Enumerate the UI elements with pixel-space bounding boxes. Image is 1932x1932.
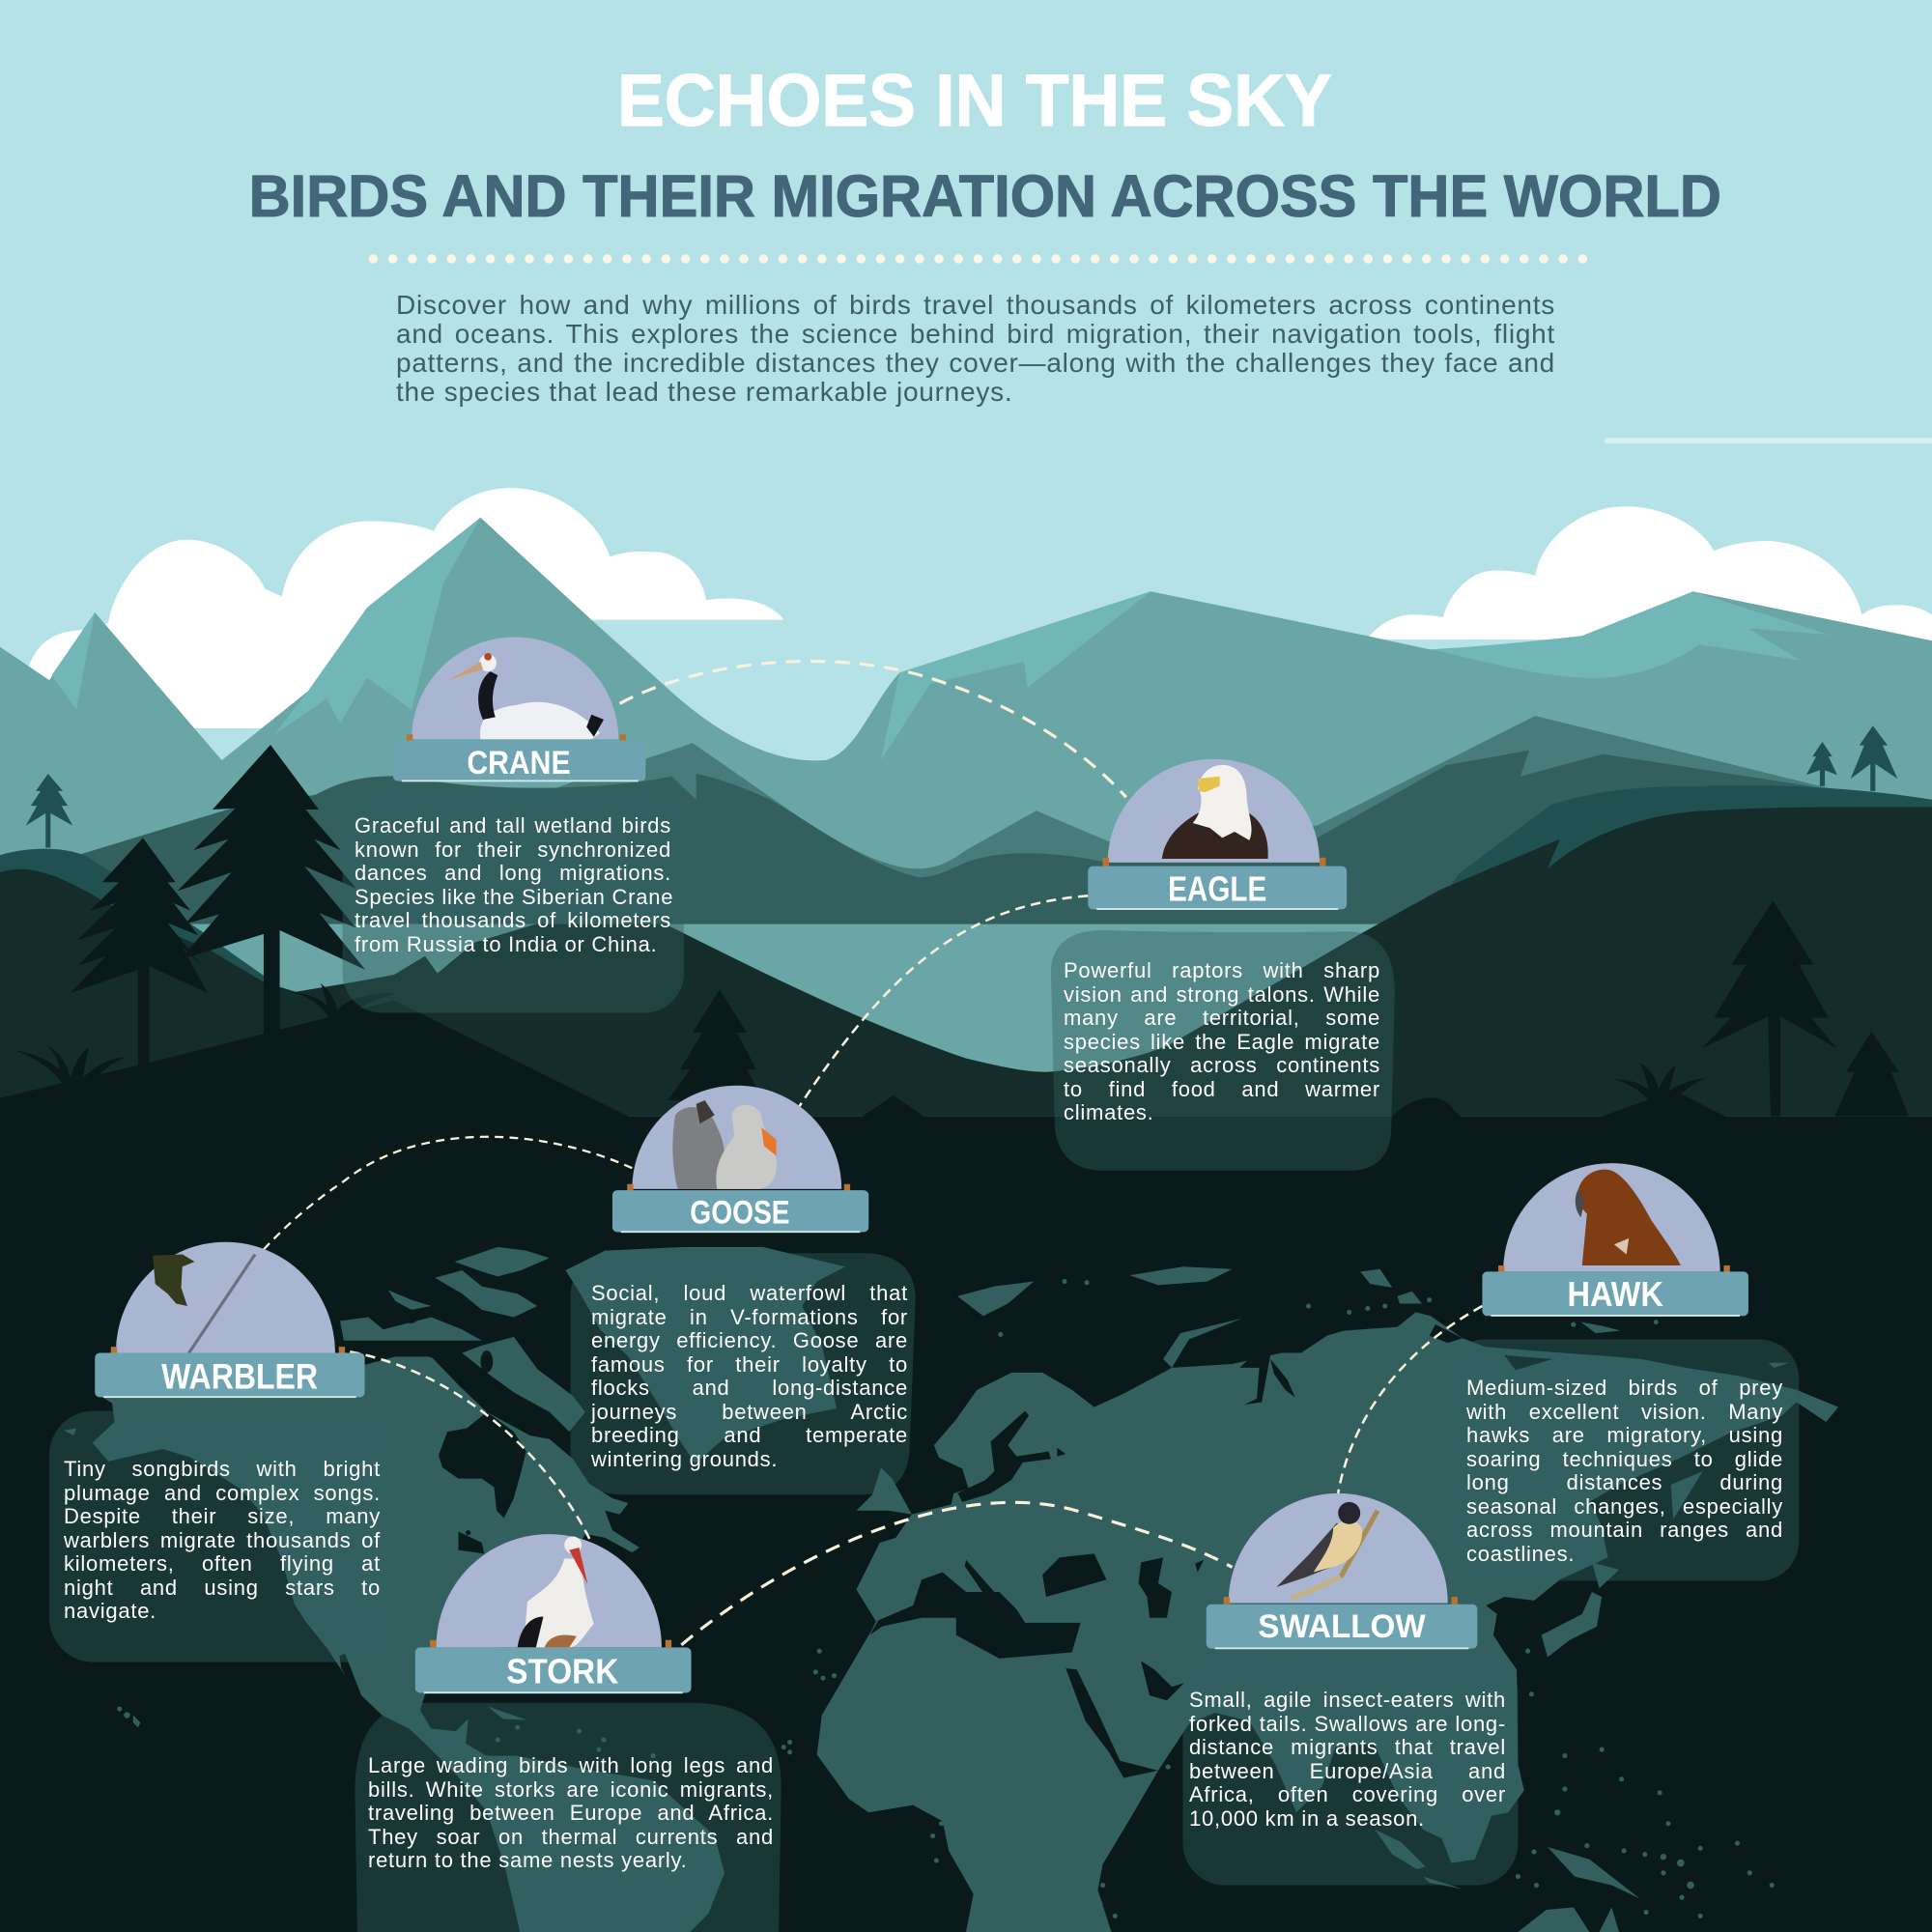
marker: stork: STORK <box>506 1652 618 1690</box>
panel: swallow background <box>1182 1651 1518 1886</box>
arrow: crane to eagle <box>620 661 1126 797</box>
text: goose description: flocks and long-distance <box>591 1376 908 1400</box>
text: stork description: They soar on thermal currents and <box>368 1824 774 1849</box>
marker: swallow <box>1207 1493 1477 1649</box>
text: eagle description: species like the Eagle migrate <box>1064 1030 1380 1053</box>
text: goose description <box>590 1281 908 1470</box>
text: eagle description: seasonally across continents <box>1064 1053 1380 1077</box>
clouds <box>27 488 1932 728</box>
text: swallow description: Africa, often covering over <box>1189 1782 1506 1806</box>
text: stork description: Large wading birds with long legs and <box>368 1753 774 1777</box>
text: swallow description: forked tails. Swallows are long- <box>1189 1712 1506 1735</box>
text: warbler description <box>64 1457 381 1623</box>
world map <box>64 1247 1838 1932</box>
intro text: and oceans. This explores the science behind bird migration, their navigation tools, flight <box>396 319 1555 349</box>
text: hawk description: seasonal changes, especially <box>1466 1493 1783 1519</box>
marker: eagle <box>1088 759 1347 910</box>
marker: eagle: EAGLE <box>1168 869 1266 908</box>
map island dots <box>117 1279 1775 1918</box>
text: stork description: return to the same nests yearly. <box>368 1848 688 1872</box>
intro text <box>396 290 1555 407</box>
text: hawk description: soaring techniques to glide <box>1466 1447 1783 1470</box>
subtitle: BIRDS AND THEIR MIGRATION ACROSS THE WORLD <box>249 163 1721 229</box>
marker: crane <box>393 637 645 781</box>
marker: hawk: HAWK <box>1567 1275 1663 1314</box>
text: goose description: energy efficiency. Goose are <box>591 1328 908 1352</box>
panel: warbler background <box>49 1410 397 1662</box>
text: eagle description: to find food and warmer <box>1064 1076 1380 1101</box>
marker: stork <box>415 1534 692 1693</box>
panel: crane background <box>343 788 684 1012</box>
text: eagle description: climates. <box>1064 1100 1154 1124</box>
text: crane description: Graceful and tall wetland birds <box>355 813 671 838</box>
text: goose description: wintering grounds. <box>591 1447 778 1470</box>
marker: warbler: WARBLER <box>161 1356 318 1396</box>
text: warbler description: Despite their size, many <box>64 1504 381 1528</box>
text: warbler description: warblers migrate thousands of <box>64 1528 381 1551</box>
intro text: Discover how and why millions of birds travel thousands of kilometers across continents <box>396 290 1555 320</box>
text: swallow description <box>1189 1688 1506 1830</box>
text: stork description: bills. White storks are iconic migrants, <box>368 1777 774 1801</box>
arrow: goose to warbler <box>264 1137 632 1249</box>
text: hawk description: long distances during <box>1466 1470 1783 1494</box>
text: hawk description: coastlines. <box>1466 1542 1575 1565</box>
text: swallow description: distance migrants that travel <box>1189 1735 1506 1759</box>
arrow: eagle to goose <box>799 895 1088 1108</box>
arrow: stork to swallow <box>681 1502 1233 1645</box>
arrow: hawk to swallow <box>1338 1306 1482 1493</box>
foreground ground <box>0 1001 1932 1932</box>
text: crane description: from Russia to India or China. <box>355 931 658 956</box>
intro text: the species that lead these remarkable journeys. <box>396 377 1012 407</box>
text: goose description: journeys between Arctic <box>591 1399 908 1424</box>
panel: stork background <box>355 1703 781 1932</box>
text: goose description: migrate in V-formations for <box>591 1304 908 1329</box>
mountains <box>0 518 1932 1117</box>
text: eagle description: Powerful raptors with sharp <box>1064 958 1380 982</box>
text: crane description: Species like the Siberian Crane <box>355 885 673 908</box>
marker: swallow: SWALLOW <box>1258 1608 1426 1645</box>
arrow: warbler to stork <box>350 1351 591 1543</box>
text: crane description <box>355 813 673 956</box>
title: ECHOES IN THE SKY <box>617 60 1332 142</box>
text: crane description: known for their synchronized <box>355 837 671 862</box>
panel: goose background <box>571 1253 916 1494</box>
text: hawk description: with excellent vision. Many <box>1466 1399 1783 1424</box>
text: swallow description: Small, agile insect-eaters with <box>1189 1688 1506 1712</box>
plants <box>13 983 1707 1112</box>
text: warbler description: Tiny songbirds with bright <box>64 1457 381 1481</box>
text: warbler description: navigate. <box>64 1599 156 1623</box>
intro text: patterns, and the incredible distances they cover—along with the challenges they face and <box>396 348 1555 378</box>
text: goose description: famous for their loyalty to <box>591 1352 908 1376</box>
text: hawk description: Medium-sized birds of prey <box>1466 1376 1783 1400</box>
marker: goose <box>612 1086 868 1233</box>
hills <box>0 785 1932 1117</box>
trees <box>26 725 1909 1117</box>
text: swallow description: 10,000 km in a season. <box>1189 1806 1425 1830</box>
text: warbler description: kilometers, often flying at <box>64 1551 381 1576</box>
text: hawk description <box>1466 1376 1783 1565</box>
text: hawk description: hawks are migratory, using <box>1466 1423 1783 1447</box>
panel: eagle background <box>1051 930 1395 1171</box>
text: stork description: traveling between Europe and Africa. <box>368 1801 774 1825</box>
panel: hawk background <box>1445 1339 1799 1580</box>
text: crane description: dances and long migrations. <box>355 861 671 885</box>
text: goose description: breeding and temperate <box>591 1423 908 1447</box>
text: crane description: travel thousands of kilometers <box>355 908 671 932</box>
text: eagle description: vision and strong talons. While <box>1064 981 1380 1007</box>
text: eagle description: many are territorial, some <box>1064 1006 1380 1030</box>
marker: crane: CRANE <box>467 745 571 781</box>
text: warbler description: night and using stars to <box>64 1575 381 1600</box>
marker: goose: GOOSE <box>690 1195 790 1232</box>
text: stork description <box>368 1753 774 1872</box>
text: hawk description: across mountain ranges and <box>1466 1518 1783 1542</box>
map seas and lakes <box>339 1314 1552 1778</box>
text: eagle description <box>1064 958 1380 1124</box>
marker: hawk <box>1482 1163 1748 1317</box>
text: swallow description: between Europe/Asia and <box>1189 1758 1506 1783</box>
text: warbler description: plumage and complex songs. <box>64 1480 381 1505</box>
marker: warbler <box>95 1242 365 1398</box>
text: goose description: Social, loud waterfowl that <box>591 1281 908 1305</box>
